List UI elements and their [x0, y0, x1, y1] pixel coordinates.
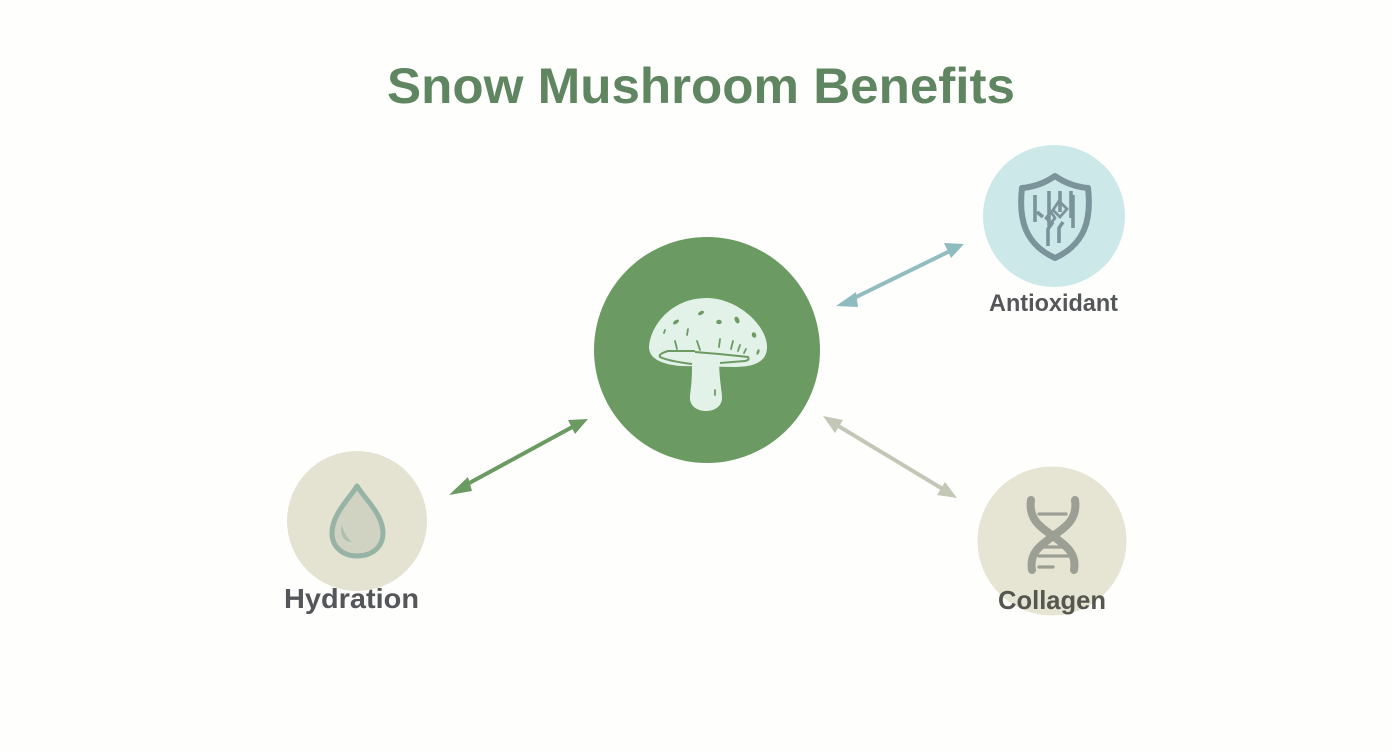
title: Snow Mushroom Benefits: [387, 58, 1015, 114]
icon: mushroom: [649, 298, 767, 411]
arrow: centre to collagen: [823, 416, 957, 498]
icon: water drop: [332, 486, 383, 556]
antioxidant node: [983, 145, 1125, 317]
label: Hydration: Hydration: [284, 583, 419, 614]
label: Collagen: Collagen: [998, 585, 1106, 615]
icon: DNA helix: [1031, 500, 1075, 570]
arrow: centre to hydration: [449, 419, 588, 495]
arrow: centre to antioxidant: [836, 243, 964, 307]
label: Antioxidant: Antioxidant: [989, 290, 1118, 317]
icon: shield: [1021, 176, 1089, 258]
central mushroom node: [594, 237, 820, 463]
hydration node: [284, 451, 427, 614]
collagen node: [978, 466, 1126, 616]
